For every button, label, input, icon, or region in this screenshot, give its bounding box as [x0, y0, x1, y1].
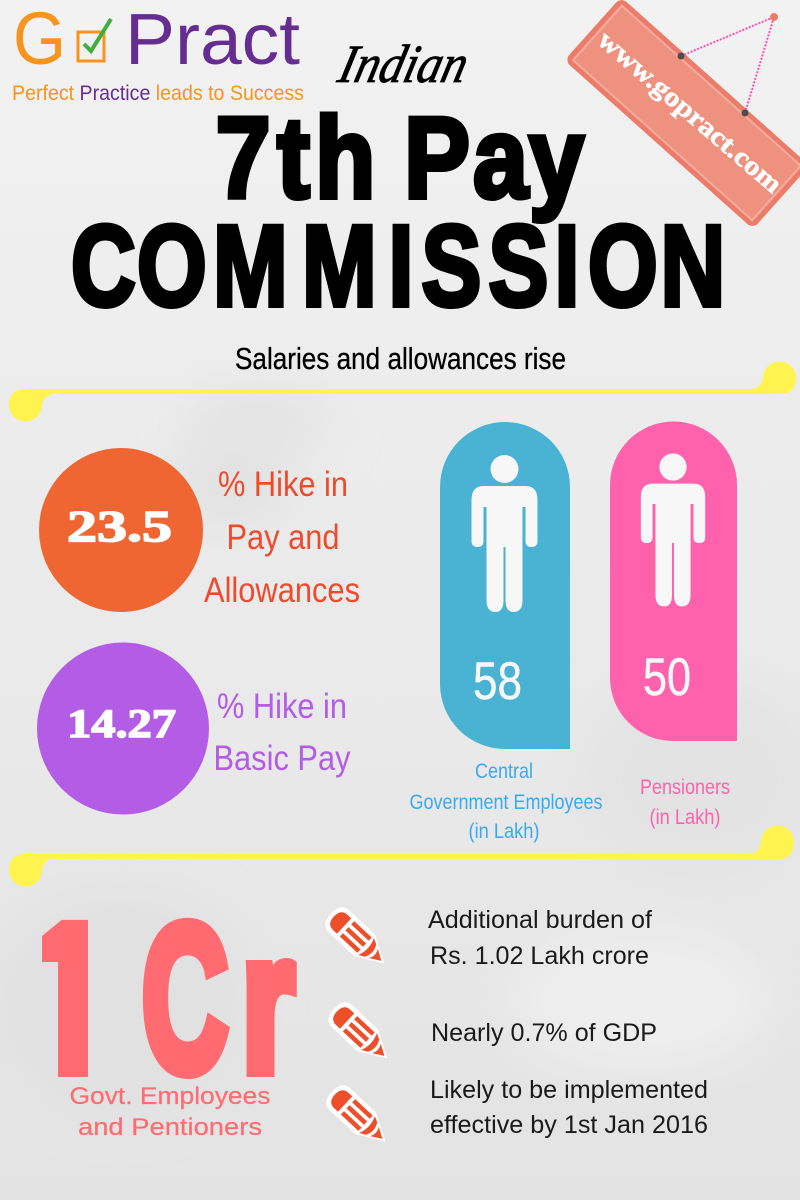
- caption: (in Lakh): [468, 820, 540, 843]
- label: [214, 687, 351, 778]
- icon: pencil 3: [322, 1081, 396, 1153]
- big number: 1 Cr: C: [142, 883, 228, 1115]
- pink pill: [610, 422, 737, 741]
- sign board: [568, 1, 800, 225]
- caption: [410, 760, 602, 843]
- icon: person: [641, 453, 705, 606]
- caption: [640, 776, 730, 829]
- caption: Govt. Employees and Pentioners: Govt. Employees: [70, 1083, 270, 1110]
- stat: 14.27: [37, 642, 351, 814]
- sign text: www.gopract.com: [592, 24, 789, 199]
- big number: 1 Cr: r: [242, 894, 294, 1112]
- label: [204, 465, 360, 610]
- value: 23.5: [67, 502, 172, 551]
- caption: Government Employees: [410, 791, 602, 814]
- bullet text 3: [430, 1076, 708, 1139]
- bullet text 1: [428, 906, 652, 970]
- label: Basic Pay: [214, 739, 351, 778]
- hanging sign: www.gopract.com: [568, 1, 800, 225]
- title line: COMMISSION: COMMISSION: [71, 202, 725, 330]
- purple circle: [37, 642, 209, 814]
- caption: Central: [475, 760, 533, 783]
- logo tagline: Perfect Practice leads to Success: [12, 82, 304, 105]
- divider 1: [9, 362, 796, 422]
- bullet text 3: Likely to be implemented: [430, 1076, 708, 1104]
- caption: (in Lakh): [650, 806, 720, 829]
- orange circle: [39, 448, 203, 612]
- panel: pensioners: [610, 422, 737, 829]
- label: Allowances: [204, 571, 360, 610]
- caption: Govt. Employees and Pentioners: and Pentioners: [78, 1114, 262, 1141]
- divider 2: [9, 826, 794, 887]
- title line: 7th Pay: 7th Pay: [216, 93, 584, 222]
- panel: central government employees: [410, 422, 602, 843]
- label: Pay and: [226, 518, 340, 557]
- icon: person: [472, 455, 538, 612]
- label: % Hike in: [218, 465, 348, 504]
- label: % Hike in: [217, 687, 347, 726]
- logo checkbox: [78, 19, 111, 61]
- bullet text 3: effective by 1st Jan 2016: [430, 1111, 708, 1139]
- bullet text 1: Rs. 1.02 Lakh crore: [430, 942, 649, 970]
- sign string: [681, 17, 774, 113]
- logo word Pract: Pract: [125, 0, 300, 80]
- stat: 23.5: [39, 448, 360, 612]
- subtitle: Salaries and allowances rise: [235, 341, 566, 376]
- logo: GoPract: [12, 0, 304, 105]
- caption: Pensioners: [640, 776, 730, 799]
- value: 14.27: [67, 701, 176, 746]
- script heading: Indian: Indian: [332, 34, 475, 94]
- blue pill: [440, 422, 570, 749]
- caption: Govt. Employees and Pentioners: [70, 1083, 270, 1141]
- icon: pencil 1: [321, 903, 395, 975]
- bullet text 2: Nearly 0.7% of GDP: [431, 1019, 657, 1047]
- value: 58: [473, 652, 522, 711]
- icon: pencil 2: [324, 998, 398, 1070]
- big number: 1 Cr: 1: [24, 883, 116, 1115]
- value: 50: [643, 648, 691, 707]
- big number: 1 Cr: [42, 918, 297, 1079]
- bullet text 1: Additional burden of: [428, 906, 652, 934]
